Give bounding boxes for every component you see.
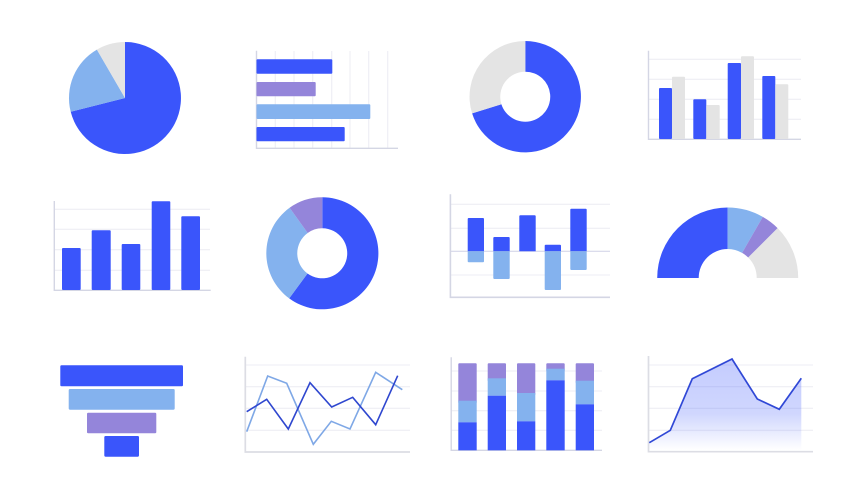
- horizontal bar chart: [256, 51, 398, 148]
- clustered column chart: [648, 51, 801, 139]
- line chart: [245, 357, 410, 452]
- funnel chart: [60, 365, 183, 457]
- positive and negative bar chart: [450, 194, 610, 297]
- column chart: [54, 201, 211, 290]
- semicircle gauge chart: [657, 208, 798, 278]
- donut chart: blue and grey: [470, 41, 581, 152]
- donut chart: three segments: [266, 197, 378, 309]
- area chart: [648, 356, 813, 452]
- pie chart: [69, 42, 181, 154]
- stacked column chart: [451, 357, 602, 450]
